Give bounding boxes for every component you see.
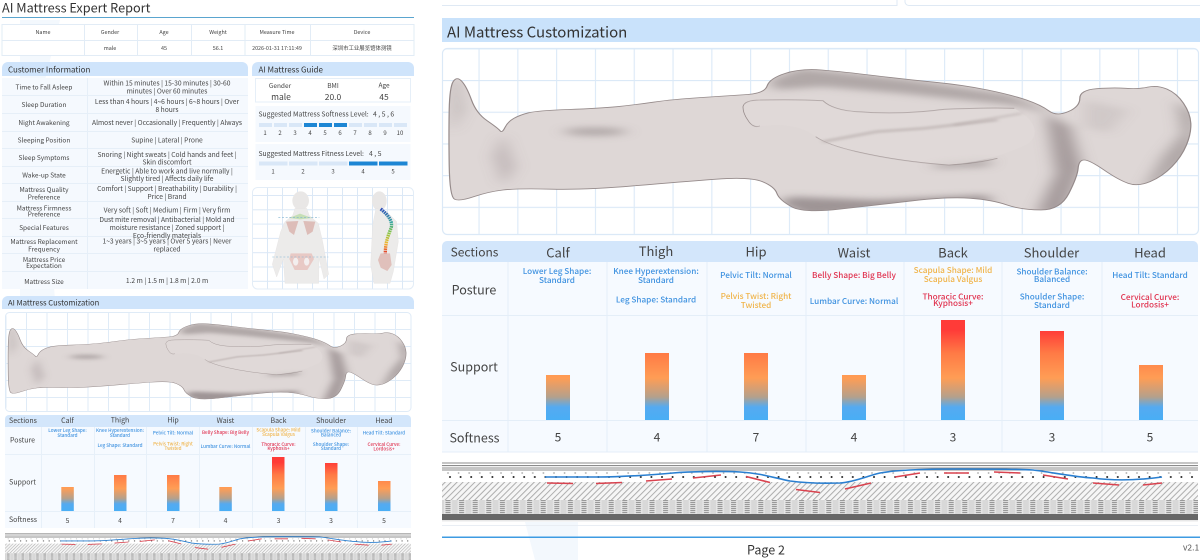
table: questionnaire rows: Mattress Replacement xyxy=(10,236,78,246)
posture findings: Balanced xyxy=(321,432,341,438)
bar chart: support xyxy=(61,457,391,511)
heading: customization xyxy=(2,296,414,309)
figure: back view with spine xyxy=(272,191,329,283)
table: subject details: 45 xyxy=(161,44,167,52)
chart: body scan (page 2) xyxy=(442,48,1198,234)
posture findings: Scapula Valgus xyxy=(262,432,296,438)
posture findings: Standard xyxy=(638,274,674,286)
header row xyxy=(9,416,393,426)
posture findings: Cervical Curve: xyxy=(368,441,401,448)
table: questionnaire rows: Wake-up State xyxy=(22,170,66,180)
posture findings: Head Tilt: Standard xyxy=(363,430,405,436)
table: questionnaire rows: Skin discomfort xyxy=(143,156,192,166)
posture findings xyxy=(523,264,1188,311)
table: questionnaire rows: Energetic | Able to work and live normally | xyxy=(101,166,233,176)
softness values: 3 xyxy=(1049,428,1055,446)
card: fitness level scale: Suggested Mattress Fitness Level: xyxy=(258,148,364,158)
table: questionnaire rows: Special Features xyxy=(19,222,69,232)
header row: Thigh xyxy=(639,241,673,260)
table: questionnaire rows: Less than 4 hours | 4~6 hours | 6~8 hours | Over xyxy=(95,96,239,106)
posture findings: Thoracic Curve: xyxy=(923,290,983,302)
posture findings: Kyphosis+ xyxy=(933,297,973,309)
card: gender bmi age: 20.0 xyxy=(325,91,342,103)
table: questionnaire rows: Sleep Duration xyxy=(22,99,66,109)
posture findings: Leg Shape: Standard xyxy=(97,442,143,449)
table: questionnaire rows: Preference xyxy=(28,192,61,202)
header row: Thigh xyxy=(111,416,129,426)
softness values: 4 xyxy=(224,515,228,525)
posture findings: Kyphosis+ xyxy=(267,445,290,452)
row labels: Softness xyxy=(449,428,500,446)
table: questionnaire rows: Supine | Lateral | Prone xyxy=(131,134,203,144)
softness values: 5 xyxy=(555,428,562,446)
posture findings: Standard xyxy=(57,432,78,439)
panel: AI mattress customization (page 1) xyxy=(2,296,414,560)
panel: spine figures xyxy=(252,188,414,289)
heading: AI mattress customization (page 2): AI Mattress Customization xyxy=(447,22,627,42)
header row: Shoulder xyxy=(1024,242,1080,262)
row labels: Softness xyxy=(9,515,38,525)
softness values: 5 xyxy=(382,515,386,525)
table: questionnaire rows: Mattress Quality xyxy=(19,184,69,194)
table: questionnaire rows: 1.2 m | 1.5 m | 1.8 m | 2.0 m xyxy=(126,275,208,285)
softness values: 4 xyxy=(851,428,858,446)
panel: customer information xyxy=(2,62,248,289)
mattress cross-section (page 2) xyxy=(442,462,1198,522)
card: gender bmi age: BMI xyxy=(327,80,339,90)
card: gender bmi age xyxy=(256,78,410,103)
header row: Back xyxy=(271,416,287,426)
row labels: Support xyxy=(450,356,498,376)
table: questionnaire rows: 1~3 years | 3~5 years | Over 5 years | Never xyxy=(103,236,232,246)
posture findings: Lordosis+ xyxy=(373,446,395,452)
posture findings: Scapula Shape: Mild xyxy=(256,426,301,434)
row labels xyxy=(449,280,500,446)
posture findings: Twisted xyxy=(164,445,182,452)
table: sections xyxy=(5,415,411,528)
posture findings: Lower Leg Shape: xyxy=(48,427,87,434)
card: gender bmi age: Age xyxy=(378,80,390,90)
posture findings: Knee Hyperextension: xyxy=(96,427,145,434)
panel: AI mattress guide xyxy=(252,62,414,180)
card: fitness level scale: 4 xyxy=(361,166,365,176)
posture findings: Shoulder Balance: xyxy=(1016,266,1088,278)
row labels xyxy=(9,436,38,525)
card: fitness level scale: 4 , 5 xyxy=(369,148,382,158)
card: softness level scale: 8 xyxy=(368,128,372,137)
softness values: 3 xyxy=(277,515,281,525)
header row: Calf xyxy=(546,242,571,262)
posture findings: Leg Shape: Standard xyxy=(616,294,696,306)
header row: Shoulder xyxy=(316,416,346,426)
table: questionnaire rows: Mattress Price xyxy=(23,254,66,264)
card: softness level scale: 4 xyxy=(308,128,312,137)
table: questionnaire rows: Almost never | Occasionally | Frequently | Always xyxy=(92,117,242,127)
heading: customization: AI Mattress Customization xyxy=(8,298,99,308)
header row: Waist xyxy=(217,416,235,426)
card: softness level scale: 5 xyxy=(323,128,327,137)
posture findings: Cervical Curve: xyxy=(1121,291,1179,303)
card: fitness level scale xyxy=(256,144,410,180)
table: subject details: male xyxy=(104,44,116,52)
card: gender bmi age: male xyxy=(271,91,291,103)
table: subject details: 深圳市工业展览馆体测镜 xyxy=(332,44,392,52)
softness values: 3 xyxy=(329,515,333,525)
posture findings: Lumbar Curve: Normal xyxy=(201,443,251,450)
header row: Head xyxy=(1134,242,1166,262)
posture findings: Pelvic Tilt: Normal xyxy=(720,269,792,281)
table: subject details: Device xyxy=(354,28,370,36)
previous panel bottoms (page 2 top) xyxy=(442,0,1200,6)
table: questionnaire rows: Snoring | Night sweats | Cold hands and feet | xyxy=(97,149,237,159)
table: questionnaire rows: Time to Fall Asleep xyxy=(16,82,72,92)
heading: customer information xyxy=(2,62,248,76)
chart: body scan xyxy=(6,312,411,412)
card: softness level scale xyxy=(256,106,410,142)
softness values: 3 xyxy=(950,428,956,446)
posture findings: Twisted xyxy=(741,299,771,311)
posture findings: Shoulder Shape: xyxy=(1020,290,1084,302)
table: questionnaire rows: Within 15 minutes | 15-30 minutes | 30-60 xyxy=(104,78,231,88)
card: softness level scale: 2 xyxy=(278,128,282,137)
heading: guide: AI Mattress Guide xyxy=(258,64,323,76)
row labels: Posture xyxy=(10,436,35,446)
row labels: Support xyxy=(9,478,36,488)
posture findings: Shoulder Shape: xyxy=(313,441,350,448)
posture findings: Pelvic Tilt: Normal xyxy=(153,430,194,436)
card: fitness level scale: 5 xyxy=(391,166,395,176)
posture findings: Balanced xyxy=(1034,273,1070,285)
card: fitness level scale: 1 xyxy=(271,166,275,176)
table: subject details: Measure Time xyxy=(259,28,295,36)
header row xyxy=(451,241,1166,262)
card: fitness level scale: 2 xyxy=(301,166,305,176)
softness values: 4 xyxy=(118,515,122,525)
table: subject details: Name xyxy=(36,28,50,36)
card: softness level scale: 4 , 5 , 6 xyxy=(373,108,394,118)
posture findings: Belly Shape: Big Belly xyxy=(812,269,897,281)
figure: side view with spine xyxy=(371,191,398,283)
table: questionnaire rows: Sleep Symptoms xyxy=(19,152,69,162)
table: questionnaire rows: Mattress Firmness xyxy=(17,202,71,212)
header row: Calf xyxy=(61,416,75,426)
table: questionnaire rows: Comfort | Support | Breathability | Durability | xyxy=(97,183,237,193)
posture findings: Head Tilt: Standard xyxy=(1112,269,1188,281)
table: questionnaire rows: Mattress Size xyxy=(24,276,64,286)
header row: Hip xyxy=(745,242,767,260)
table: questionnaire rows: Eco-friendly materials xyxy=(133,230,201,240)
table: subject details: Age xyxy=(159,28,169,36)
heading: customer information: Customer Information xyxy=(8,64,90,76)
card: fitness level scale: 3 xyxy=(331,166,335,176)
page background watermark xyxy=(20,20,690,560)
table: questionnaire rows: Night Awakening xyxy=(18,117,70,127)
table: questionnaire rows: Price | Brand xyxy=(147,191,187,201)
row labels: Posture xyxy=(452,280,496,298)
header row: Back xyxy=(938,242,969,262)
table: questionnaire rows: moisture resistance | Zoned support | xyxy=(110,222,225,232)
table: questionnaire rows: Dust mite removal | Antibacterial | Mold and xyxy=(99,214,235,224)
posture findings xyxy=(48,426,405,452)
version: v2.1 xyxy=(1183,542,1200,554)
card: softness level scale: 7 xyxy=(353,128,357,137)
title rule xyxy=(2,17,414,18)
mattress cross-section (page 1) xyxy=(5,533,411,560)
table: questionnaire rows: Frequency xyxy=(28,244,61,254)
card: softness level scale: Suggested Mattress Softness Level: xyxy=(258,108,369,118)
card: gender bmi age: Gender xyxy=(269,80,292,90)
table: questionnaire rows: replaced xyxy=(153,244,181,254)
posture findings: Lumbar Curve: Normal xyxy=(810,295,899,307)
softness values: 5 xyxy=(1147,428,1154,446)
table: subject details: 2026-01-31 17:11:49 xyxy=(252,44,302,52)
softness values: 4 xyxy=(654,428,661,446)
softness values: 7 xyxy=(753,428,760,446)
card: softness level scale: 1 xyxy=(263,128,267,137)
posture findings: Scapula Valgus xyxy=(924,273,982,285)
page number: Page 2 xyxy=(747,540,785,558)
table: subject details: 56.1 xyxy=(213,44,223,52)
posture findings: Standard xyxy=(110,432,130,439)
posture findings: Standard xyxy=(1034,299,1070,311)
table: subject details: Gender xyxy=(101,28,120,36)
softness values xyxy=(66,515,386,525)
card: gender bmi age: 45 xyxy=(379,91,389,103)
table: questionnaire rows: Very soft | Soft | Medium | Firm | Very firm xyxy=(104,204,230,214)
posture findings: Standard xyxy=(539,274,575,286)
table: questionnaire rows: Preference xyxy=(28,208,61,218)
table: questionnaire rows xyxy=(2,78,248,289)
posture findings: Knee Hyperextension: xyxy=(613,265,699,277)
card: softness level scale: 9 xyxy=(383,128,387,137)
posture findings: Pelvis Twist: Right xyxy=(153,440,193,448)
posture findings: Standard xyxy=(321,445,341,452)
posture findings: Belly Shape: Big Belly xyxy=(202,429,250,436)
header row: Head xyxy=(375,416,393,426)
softness values xyxy=(555,428,1154,446)
card: softness level scale: 10 xyxy=(397,128,404,137)
heading: AI mattress customization (page 2) xyxy=(442,18,1200,42)
softness values: 5 xyxy=(66,515,70,525)
table: questionnaire rows: 8 hours xyxy=(155,104,179,114)
softness values: 7 xyxy=(171,515,175,525)
bar chart: support xyxy=(546,320,1163,420)
table: questionnaire rows: Sleeping Position xyxy=(18,134,70,144)
posture findings: Pelvis Twist: Right xyxy=(721,290,792,302)
heading: guide xyxy=(252,62,414,76)
table: questionnaire rows: minutes | Over 60 minutes xyxy=(127,86,207,96)
card: softness level scale: 3 xyxy=(293,128,297,137)
table: subject details: Weight xyxy=(209,28,227,36)
header row: Sections xyxy=(451,244,499,260)
header row: Hip xyxy=(167,416,179,426)
table: questionnaire rows: Expectation xyxy=(26,260,62,270)
footer rule xyxy=(442,536,1200,538)
posture findings: Lower Leg Shape: xyxy=(523,265,591,277)
posture findings: Shoulder Balance: xyxy=(311,428,352,434)
header row: Sections xyxy=(9,416,38,426)
table: sections (page 2) xyxy=(442,241,1198,452)
table: questionnaire rows: Slightly tired | Affects daily life xyxy=(120,173,214,183)
posture findings: Lordosis+ xyxy=(1131,298,1169,310)
table: subject details xyxy=(2,24,414,56)
posture findings: Thoracic Curve: xyxy=(261,441,296,448)
header row: Waist xyxy=(838,242,870,262)
card: softness level scale: 6 xyxy=(338,128,342,137)
posture findings: Scapula Shape: Mild xyxy=(914,264,992,276)
